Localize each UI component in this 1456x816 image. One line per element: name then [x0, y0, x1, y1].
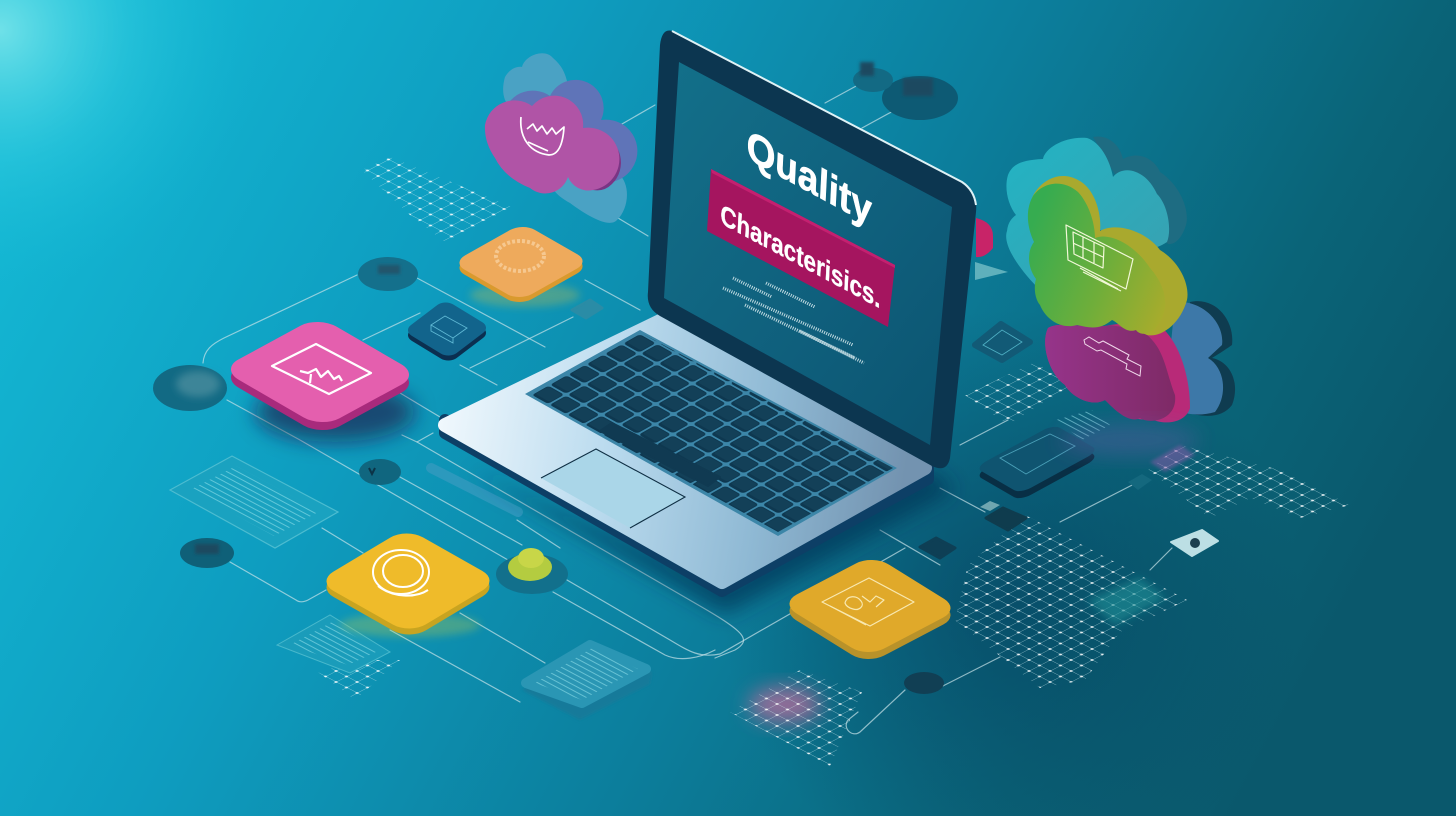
ruler bar — [431, 468, 518, 512]
purple text block on mesh — [1150, 445, 1195, 472]
icon: framed picture — [822, 578, 914, 626]
icon: tool — [1084, 337, 1141, 376]
cloud: right back teal — [1006, 137, 1187, 290]
icon: ring — [373, 550, 429, 596]
right yellow tile with image icon — [780, 555, 960, 664]
chip: connector small — [920, 538, 955, 558]
disc: small node — [359, 459, 401, 485]
cloud: top left back — [503, 53, 627, 223]
keyboard keys — [532, 333, 893, 532]
deck surface — [445, 321, 925, 582]
mesh grid: below left card — [318, 660, 400, 700]
cloud: right green with monitor icon — [1028, 176, 1188, 335]
cloud: right back blue — [1185, 301, 1235, 416]
tile shadow: pink — [255, 382, 415, 442]
teal blur panel on mesh — [1088, 578, 1165, 625]
pink tile with chart icon — [220, 316, 420, 436]
disc: bottom right small — [904, 672, 944, 694]
mesh grid: bottom right — [955, 515, 1187, 688]
flat card: left text panel — [170, 456, 338, 548]
icon: chart window — [272, 344, 371, 394]
flat card: lower left text panel — [277, 615, 390, 673]
display — [664, 62, 952, 445]
spacebar — [600, 423, 720, 486]
bezel — [648, 31, 976, 468]
screen title: Quality — [746, 120, 873, 235]
laptop screen — [648, 31, 976, 468]
connector tab: far right — [1128, 474, 1152, 490]
disc: upper left node — [358, 257, 418, 291]
red disc behind laptop — [975, 218, 1008, 280]
soft purple glow on floor — [1060, 424, 1200, 456]
fine print — [723, 278, 864, 363]
icon: monitor — [1066, 225, 1133, 291]
keyboard well — [525, 330, 897, 536]
top highlight — [672, 31, 976, 205]
orange tile with gear icon — [452, 223, 590, 306]
mini text panel above device — [1056, 410, 1110, 440]
mesh grid: far right — [1148, 445, 1350, 518]
connector lines — [203, 85, 1172, 734]
banner — [707, 169, 895, 327]
mesh grid: bottom centre with pink glow — [730, 670, 862, 766]
front edge — [445, 420, 928, 591]
plug icon: right — [1171, 530, 1218, 556]
yellow tile with ring icon — [317, 528, 499, 640]
dark blue small tile — [403, 299, 491, 364]
disc with lime button — [496, 548, 568, 594]
disc: far left node — [153, 365, 227, 411]
yellow tile shadow — [340, 613, 480, 637]
icon: gear — [496, 241, 544, 271]
mesh grid: right of laptop — [965, 362, 1072, 425]
cloud: top left purple with crown icon — [485, 80, 637, 193]
screen subtitle: Characterisics. — [720, 198, 881, 315]
laptop shadow — [470, 470, 955, 615]
chip: connector right — [980, 501, 1026, 530]
disc: lower left node — [180, 538, 234, 568]
flat tile: dark small right — [975, 324, 1030, 360]
laptop base — [445, 321, 928, 591]
connector tab: by orange tile — [572, 300, 602, 318]
mesh grid: top left — [362, 157, 512, 242]
cloud: right back blue face — [1165, 302, 1223, 414]
cloud: right low purple with tool icon — [1045, 320, 1190, 422]
trackpad — [541, 449, 685, 528]
flat tile: dark device right — [975, 424, 1099, 501]
icon: crown — [521, 117, 564, 155]
flat card: bottom panel — [522, 642, 652, 720]
tile shadow: orange — [470, 283, 580, 307]
disc: top right pair — [853, 62, 958, 120]
